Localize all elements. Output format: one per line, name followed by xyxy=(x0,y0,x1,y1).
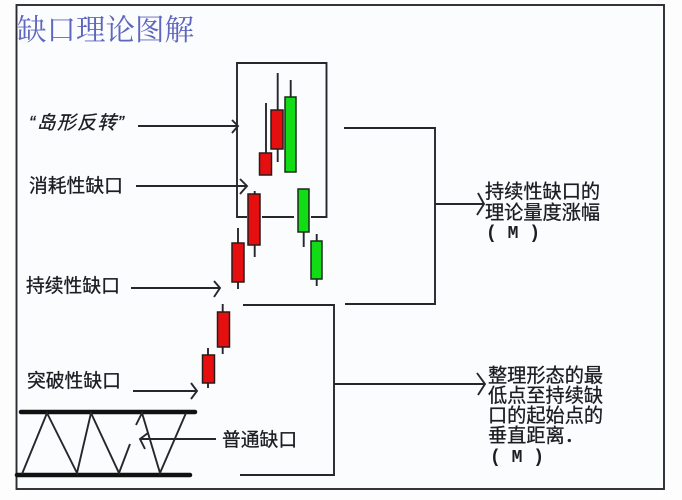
label: continuation gap: 持续性缺口 xyxy=(26,275,120,296)
arrow: island reversal xyxy=(138,120,238,133)
title: 缺口理论图解 xyxy=(17,14,194,47)
arrow: continuation gap xyxy=(131,281,220,297)
bracket: upper measure xyxy=(344,128,435,304)
text: vertical distance: ( M ) xyxy=(490,448,544,468)
arrow: upper measure xyxy=(435,193,484,215)
candlesticks xyxy=(202,73,322,388)
red candle 3 xyxy=(232,228,244,289)
text: theoretical measure: 持续性缺口的 xyxy=(485,181,600,203)
green candle 3 xyxy=(311,234,322,286)
arrow: lower measure xyxy=(334,373,485,395)
text: vertical distance: 垂直距离． xyxy=(488,425,584,447)
label: exhaustion gap: 消耗性缺口 xyxy=(29,175,123,196)
text: vertical distance xyxy=(488,365,603,468)
red candle 6 xyxy=(271,73,283,162)
label: island reversal: “岛形反转” xyxy=(29,112,125,133)
label: breakaway gap: 突破性缺口 xyxy=(27,370,121,391)
green candle 1 xyxy=(285,80,296,172)
label: common gap: 普通缺口 xyxy=(222,429,297,450)
box: island reversal xyxy=(237,63,326,217)
red candle 1 xyxy=(202,348,214,388)
consolidation pattern xyxy=(17,412,195,475)
arrow: common gap xyxy=(140,433,216,449)
arrow: breakaway gap xyxy=(133,383,197,399)
red candle 2 xyxy=(218,304,230,354)
text: vertical distance: 口的起始点的 xyxy=(488,405,603,427)
text: theoretical measure xyxy=(485,181,600,244)
bracket: lower measure xyxy=(240,305,334,475)
text: vertical distance: 整理形态的最 xyxy=(488,365,603,387)
arrow: exhaustion gap xyxy=(136,179,247,194)
text: theoretical measure: ( M ) xyxy=(486,224,540,244)
red candle 5 xyxy=(260,103,272,175)
text: theoretical measure: 理论量度涨幅 xyxy=(485,202,600,224)
text: vertical distance: 低点至持续缺 xyxy=(488,385,603,407)
red candle 4 xyxy=(248,191,260,257)
green candle 2 xyxy=(298,189,309,247)
